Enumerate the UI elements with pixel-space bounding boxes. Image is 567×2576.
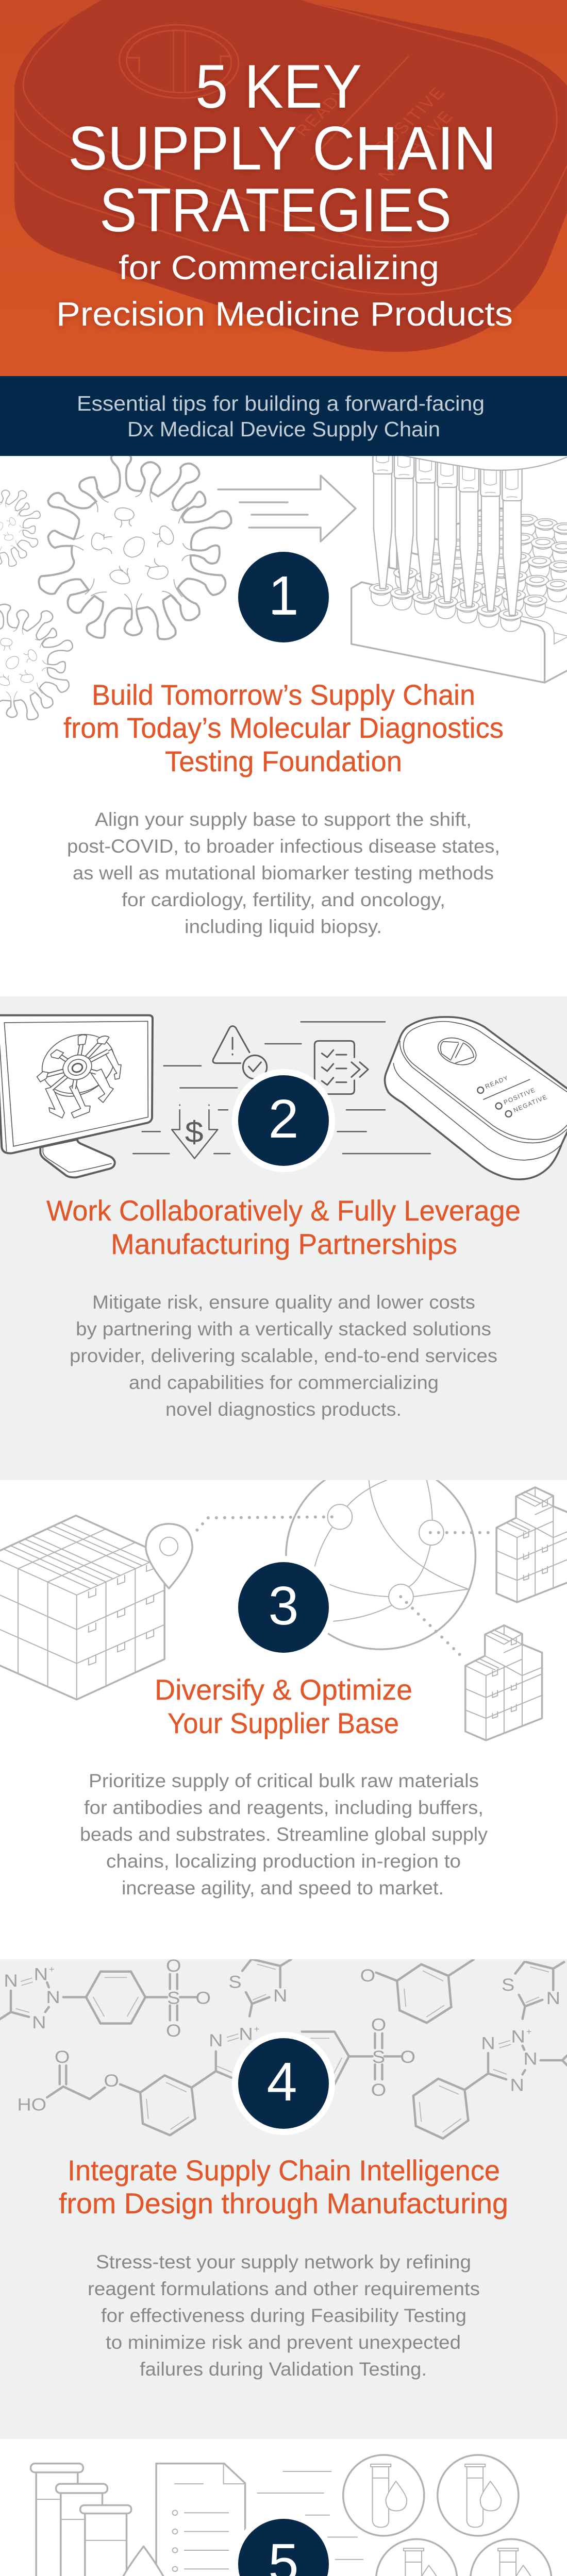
illustration: chemical structures: +: [526, 2027, 532, 2037]
illustration: chemical structures: N: [34, 1964, 48, 1984]
heading 4: [59, 2154, 508, 2219]
illustration: chemical structures: N: [510, 2075, 524, 2095]
icon: arrow: [218, 476, 356, 541]
body text 2: provider, delivering scalable, end-to-end services: [70, 1345, 497, 1366]
icon: warning triangle with check: [213, 1026, 267, 1079]
illustration: tubes, document and samples: [31, 2455, 552, 2576]
illustration: globe and supplier network: [0, 1462, 567, 1740]
heading 4: Integrate Supply Chain Intelligence: [68, 2154, 500, 2187]
test tubes: [31, 2464, 131, 2576]
drop: [116, 2546, 170, 2576]
number badge 3: [232, 1556, 335, 1659]
illustration: chemical structures: N: [523, 2048, 538, 2069]
panel: strategy 5: [0, 2439, 567, 2576]
body text 3: Prioritize supply of critical bulk raw materials: [89, 1770, 479, 1791]
sample circles: [343, 2455, 552, 2576]
illustration: chemical structures: O: [401, 2047, 415, 2067]
illustration: monitor with part on screen: [0, 1015, 153, 1177]
illustration: chemical structures: +: [254, 2024, 259, 2034]
body text 1: Align your supply base to support the shift,: [95, 809, 472, 830]
illustration: diagnostic device: NEGATIVE: [512, 1093, 548, 1114]
body text 3: beads and substrates. Streamline global supply: [80, 1824, 488, 1845]
icon: cost down arrow: $: [185, 1115, 204, 1149]
heading 1: Build Tomorrow’s Supply Chain: [92, 679, 475, 711]
globe: [286, 1462, 475, 1649]
illustration: chemical structures: HO: [17, 2094, 46, 2114]
body text 2: novel diagnostics products.: [165, 1399, 402, 1420]
illustration: chemical structures: O: [196, 1988, 211, 2008]
number badge 1: [232, 546, 335, 649]
icons: risk, cost and checklist: [133, 1022, 430, 1159]
illustration: chemical structures: N: [4, 1971, 18, 1991]
illustration: chemical structures: [0, 1955, 567, 2139]
title: [56, 52, 513, 333]
body text 1: as well as mutational biomarker testing methods: [73, 862, 494, 884]
heading 2: Work Collaboratively & Fully Leverage: [46, 1194, 521, 1227]
title: Precision Medicine Products: [56, 295, 513, 333]
subtitle band: Dx Medical Device Supply Chain: [127, 417, 440, 441]
body text 1: for cardiology, fertility, and oncology,: [122, 889, 445, 910]
body text 4: Stress-test your supply network by refining: [96, 2251, 471, 2273]
title: 5 KEY: [195, 52, 362, 121]
body text 4: reagent formulations and other requirements: [88, 2278, 480, 2299]
number badge 4: [232, 2032, 335, 2135]
illustration: viruses: [0, 453, 231, 720]
illustration: diagnostic device: POSITIVE: [503, 1086, 537, 1106]
heading 3: Diversify & Optimize: [155, 1673, 412, 1706]
body text 2: [70, 1292, 497, 1420]
number badge 5: [232, 2513, 335, 2576]
icon: checklist: [314, 1041, 368, 1094]
illustration: chemical structures: O: [371, 2079, 386, 2099]
illustration: chemical structures: O: [55, 2047, 70, 2067]
header: title banner: [0, 0, 567, 376]
body text 1: [67, 809, 500, 937]
body text 4: failures during Validation Testing.: [140, 2359, 427, 2380]
panel: strategy 1: [0, 456, 567, 996]
illustration: chemical structures: N: [511, 2026, 525, 2046]
heading 2: Manufacturing Partnerships: [111, 1228, 457, 1260]
illustration: chemical structures: O: [166, 2021, 181, 2041]
panel: strategy 3: [0, 1480, 567, 1959]
background device silhouette: [14, 0, 567, 352]
title: SUPPLY CHAIN: [68, 114, 496, 183]
document: [156, 2464, 245, 2576]
background device silhouette: READY: [291, 84, 354, 140]
pallet of boxes: [0, 1516, 164, 1700]
subtitle band: Essential tips for building a forward-facing: [77, 392, 485, 415]
body text 4: [88, 2251, 480, 2380]
heading 1: Testing Foundation: [165, 745, 402, 777]
title: STRATEGIES: [99, 176, 452, 245]
icon: cost down arrow: [172, 1105, 218, 1159]
heading 3: Your Supplier Base: [168, 1707, 399, 1739]
illustration: chemical structures: O: [360, 1965, 375, 1986]
illustration: chemical structures: N: [209, 2030, 223, 2050]
illustration: chemical structures: N: [46, 1987, 60, 2007]
background device silhouette: POSITIVE: [371, 83, 450, 156]
background device silhouette: NEGATIVE: [374, 107, 458, 184]
heading 1: [63, 679, 504, 777]
body text 1: including liquid biopsy.: [185, 916, 382, 937]
illustration: chemical structures: N: [481, 2033, 495, 2053]
number badge 1: 1: [269, 565, 298, 626]
heading 1: from Today’s Molecular Diagnostics: [63, 711, 504, 744]
illustration: chemical structures: +: [49, 1964, 55, 1974]
subtitle band: [0, 376, 567, 456]
body text 3: for antibodies and reagents, including buffers,: [84, 1797, 483, 1818]
location pin: [146, 1524, 192, 1588]
heading 3: [155, 1673, 412, 1739]
body text 2: by partnering with a vertically stacked solutions: [76, 1318, 491, 1340]
body text 2: and capabilities for commercializing: [129, 1372, 439, 1393]
heading 2: [46, 1194, 521, 1260]
title: for Commercializing: [119, 248, 439, 286]
illustration: chemical structures: S: [372, 2047, 385, 2067]
number badge 3: 3: [269, 1575, 298, 1636]
illustration: diagnostic device: READY: [484, 1074, 510, 1090]
panel: strategy 2: [0, 996, 567, 1480]
illustration: chemical structures: O: [371, 2014, 386, 2035]
number badge 2: [232, 1069, 335, 1172]
body text 2: Mitigate risk, ensure quality and lower costs: [92, 1292, 475, 1313]
body text 4: to minimize risk and prevent unexpected: [106, 2332, 461, 2353]
body text 3: chains, localizing production in-region to: [106, 1851, 461, 1872]
body text 3: [80, 1770, 488, 1899]
dotted routes: [197, 1517, 495, 1656]
body text 4: for effectiveness during Feasibility Testing: [101, 2305, 466, 2326]
illustration: chemical structures: N: [32, 2012, 46, 2032]
panel: strategy 4: [0, 1959, 567, 2439]
illustration: pipettes and tube rack: [352, 421, 567, 683]
illustration: chemical structures: S: [167, 1988, 180, 2008]
box stacks: [465, 1487, 567, 1740]
number badge 4: 4: [267, 2052, 297, 2112]
illustration: chemical structures: O: [104, 2071, 119, 2091]
body text 1: post-COVID, to broader infectious disease states,: [67, 836, 500, 857]
body text 3: increase agility, and speed to market.: [122, 1877, 444, 1899]
heading 4: from Design through Manufacturing: [59, 2187, 508, 2219]
illustration: diagnostic device: [385, 1017, 567, 1179]
illustration: chemical structures: N: [239, 2024, 253, 2044]
number badge 2: 2: [269, 1089, 298, 1149]
